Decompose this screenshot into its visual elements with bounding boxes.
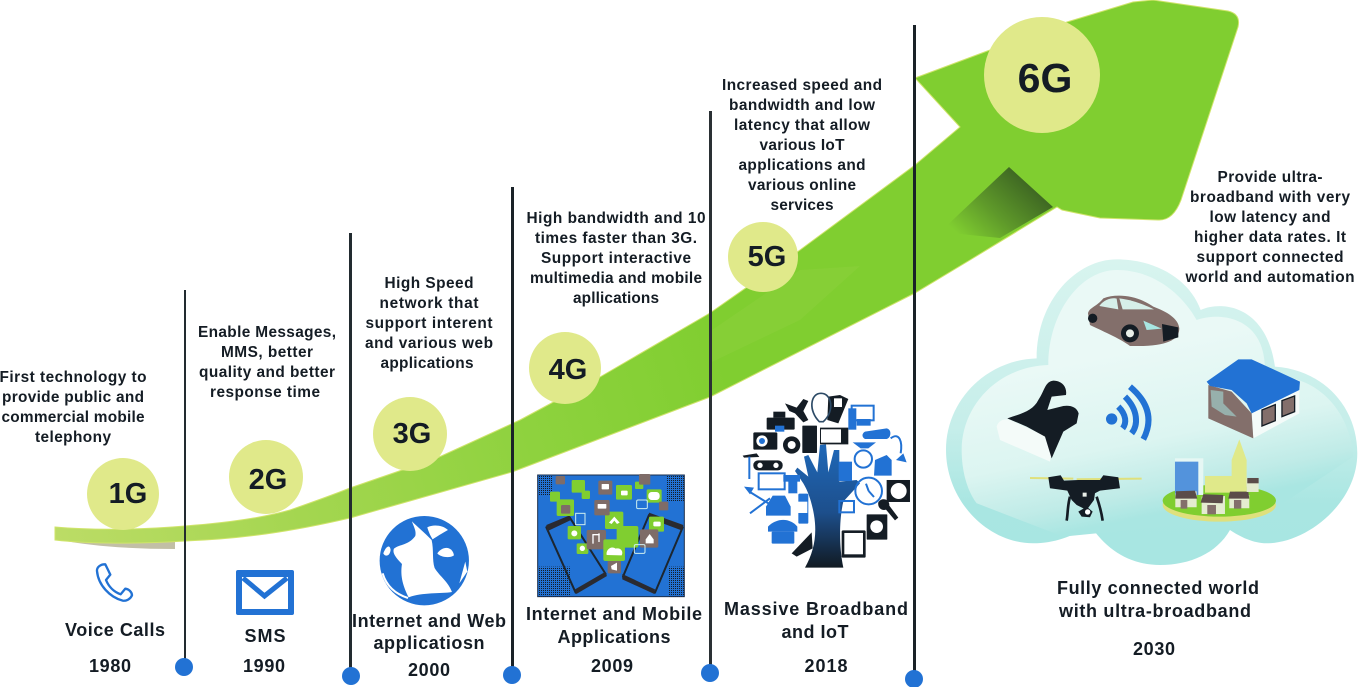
icon: envelope	[236, 570, 294, 615]
4G description: High bandwidth and 10	[526, 210, 706, 227]
2G description: quality and better	[199, 364, 335, 381]
5G description: bandwidth and low	[729, 97, 875, 114]
label: Internet and Mobile Applications	[526, 604, 702, 647]
generation badge 3G	[373, 397, 447, 471]
label: Internet and Mobile Applications: Applications	[558, 627, 670, 647]
icon: globe	[380, 516, 469, 605]
4G description: multimedia and mobile	[530, 270, 702, 287]
hand-shaped tree	[795, 444, 860, 568]
4G description: apllications	[573, 290, 659, 307]
icon: village on green island	[1163, 439, 1276, 522]
1G description: commercial mobile	[2, 409, 145, 426]
5G description: various IoT	[760, 137, 845, 154]
label: Massive Broadband and IoT: Massive Broadband	[724, 599, 908, 619]
label: Massive Broadband and IoT: and IoT	[782, 622, 848, 642]
icon: drone	[1030, 475, 1142, 521]
cloud: connected world	[946, 259, 1357, 565]
label: Internet and Web applications	[352, 611, 506, 653]
3G description: applications	[380, 355, 474, 372]
icon: house with blue roof	[1207, 359, 1300, 438]
5G description: services	[770, 197, 834, 214]
6G description: broadband with very	[1190, 189, 1350, 206]
4G description: Support interactive	[541, 250, 691, 267]
label: Fully connected world with ultra-broadband: with ultra-broadband	[1058, 601, 1251, 621]
light sheen on the arrow body	[712, 266, 860, 362]
generation badge 2G: 2G	[249, 464, 287, 496]
icon: phone handset	[97, 564, 132, 601]
icon: VR headset	[997, 381, 1079, 462]
app icon tiles	[550, 480, 664, 554]
3G description	[365, 275, 493, 372]
label: Massive Broadband and IoT	[724, 599, 908, 642]
2G description: MMS, better	[221, 344, 313, 361]
right phone	[623, 515, 683, 593]
3G description: and various web	[365, 335, 493, 352]
large cloud tile	[603, 539, 625, 561]
6G description: world and automation	[1184, 269, 1354, 286]
5G description	[722, 77, 882, 214]
generation badge 6G	[984, 17, 1100, 133]
label: Internet and Mobile Applications: Internet and Mobile	[526, 604, 702, 624]
3G description: High Speed	[384, 275, 474, 292]
generation badge 6G: 6G	[1018, 55, 1072, 101]
year 2030: 2030	[1133, 639, 1175, 659]
dark device icons	[743, 395, 910, 558]
left phone	[546, 517, 606, 593]
5G description: latency that allow	[734, 117, 870, 134]
2G description: Enable Messages,	[198, 324, 336, 341]
6G description: higher data rates. It	[1194, 229, 1346, 246]
label: SMS: SMS	[244, 626, 286, 646]
1G description: provide public and	[2, 389, 144, 406]
year 2000: 2000	[408, 660, 450, 680]
label: Voice Calls: Voice Calls	[65, 620, 165, 640]
5G description: Increased speed and	[722, 77, 882, 94]
label: Internet and Web applications: Internet and Web	[352, 611, 506, 631]
illustration: IoT device tree	[743, 393, 910, 568]
year 1990: 1990	[243, 656, 285, 676]
4G description	[526, 210, 706, 307]
3G description: support interent	[366, 315, 492, 332]
generation badge 2G	[229, 440, 303, 514]
2G description	[198, 324, 336, 401]
6G description	[1184, 169, 1354, 286]
icon: wifi signal	[1106, 387, 1148, 439]
illustration: phones with app icons	[538, 474, 684, 597]
timeline divider lines with blue end markers	[175, 25, 923, 687]
year 1980: 1980	[89, 656, 131, 676]
1G description: First technology to	[0, 369, 146, 386]
generation badge 1G: 1G	[109, 478, 147, 510]
rising green arrow	[55, 0, 1239, 549]
generation badge 3G: 3G	[393, 418, 431, 450]
2G description: response time	[210, 384, 320, 401]
generation badge 5G	[728, 222, 798, 292]
1G description	[0, 369, 146, 446]
year 2009: 2009	[591, 656, 633, 676]
icon: car	[1088, 296, 1179, 346]
3G description: network that	[380, 295, 478, 312]
6G description: low latency and	[1210, 209, 1330, 226]
6G description: support connected	[1196, 249, 1344, 266]
label: Fully connected world with ultra-broadband	[1057, 578, 1259, 621]
5G description: applications and	[738, 157, 866, 174]
year 2018: 2018	[804, 656, 848, 676]
generation badge 5G: 5G	[748, 241, 786, 273]
generation badge 1G	[87, 458, 159, 530]
label: Fully connected world with ultra-broadband: Fully connected world	[1057, 578, 1259, 598]
label: Internet and Web applications: applicatiosn	[374, 633, 484, 653]
dark shadow triangle on the arrow	[940, 167, 1053, 238]
blue device icons	[744, 408, 907, 544]
generation badge 4G	[529, 332, 601, 404]
4G description: times faster than 3G.	[535, 230, 697, 247]
1G description: telephony	[35, 429, 111, 446]
6G description: Provide ultra-	[1218, 169, 1322, 186]
5G description: various online	[748, 177, 856, 194]
generation badge 4G: 4G	[549, 354, 587, 386]
